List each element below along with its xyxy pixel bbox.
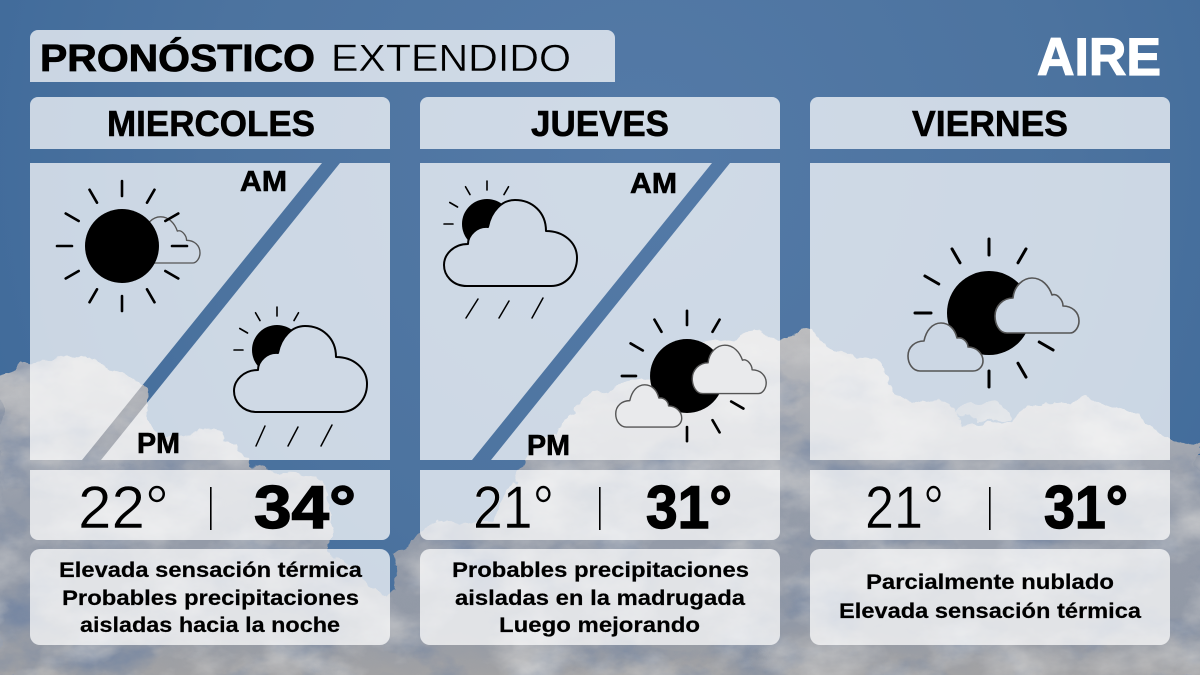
forecast panel: viernes [810,163,1170,460]
icon: sun with two clouds [908,239,1079,387]
background: clouds [0,332,1200,675]
icon: sun behind rain cloud [444,181,577,318]
label: PM: PM [137,428,180,460]
temperatures: viernes: 31° [1044,474,1128,541]
panel: viernes [810,97,1170,645]
heading: jueves [420,97,780,149]
panel: jueves [420,97,780,645]
description: viernes: Elevada sensación térmica [839,600,1141,623]
heading: miercoles: MIERCOLES [107,103,315,144]
temperatures: miercoles: 22° [78,474,169,541]
temperatures: miercoles: 34° [254,474,356,541]
description: jueves [420,549,780,645]
icon: sun with two clouds [616,311,766,441]
label: AM: AM [630,168,677,200]
description: miercoles: Elevada sensación térmica [59,559,362,582]
heading: viernes [810,97,1170,149]
description: miercoles: aisladas hacia la noche [80,614,340,637]
temperatures: jueves [420,470,780,541]
panel: miercoles [30,97,390,645]
heading: jueves: JUEVES [531,103,669,144]
description: viernes: Parcialmente nublado [866,571,1114,594]
title [30,30,615,82]
title: EXTENDIDO [331,38,571,80]
label: PM: PM [527,430,570,462]
temperatures: jueves: 31° [646,474,732,541]
forecast panel: jueves split am/pm [420,163,780,460]
icon: sun with small cloud [57,181,200,311]
description: jueves: Luego mejorando [499,614,700,637]
description: jueves: Probables precipitaciones [452,559,749,582]
temperatures: viernes [810,470,1170,541]
temperatures: jueves: 21° [473,474,554,541]
title: PRONÓSTICO [40,36,315,80]
label: AM: AM [240,166,287,198]
temperatures: miercoles [30,470,390,541]
description: miercoles [30,549,390,645]
description: miercoles: Probables precipitaciones [62,587,359,610]
temperatures: viernes: 21° [865,474,944,541]
description: viernes [810,549,1170,645]
forecast panel: miercoles split am/pm [30,163,390,460]
heading: miercoles [30,97,390,149]
heading: viernes: VIERNES [912,103,1068,144]
description: jueves: aisladas en la madrugada [455,587,745,610]
icon: sun behind rain cloud [234,307,367,446]
logo: AIRE: AIRE [1037,28,1161,87]
